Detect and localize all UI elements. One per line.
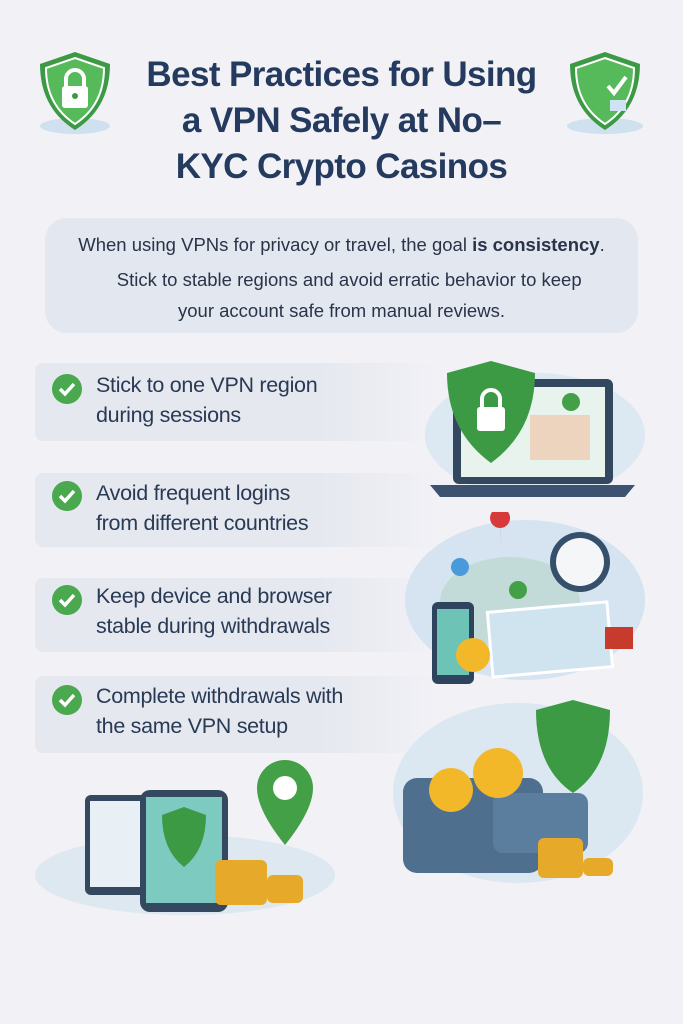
illustration: wallet with coins and shield xyxy=(393,700,643,883)
illustration: map with pins and clock xyxy=(405,512,645,684)
item 1: Stick to one VPN region xyxy=(96,373,317,397)
title: a VPN Safely at No– xyxy=(182,101,501,140)
icon: left shield xyxy=(40,52,110,134)
item 3: Keep device and browser xyxy=(96,584,332,608)
illustration: devices with pin and coins xyxy=(35,760,335,915)
title: KYC Crypto Casinos xyxy=(176,147,507,186)
item 2: from different countries xyxy=(96,511,308,535)
item 1: during sessions xyxy=(96,403,241,427)
item 1 xyxy=(35,363,435,441)
item 4 xyxy=(35,676,435,753)
item 3: stable during withdrawals xyxy=(96,614,330,638)
title xyxy=(146,55,537,186)
title: Best Practices for Using xyxy=(146,55,537,94)
intro panel: When using VPNs for privacy or travel, the goal is consistency. xyxy=(78,234,605,255)
intro panel: Stick to stable regions and avoid erratic behavior to keep xyxy=(117,269,582,290)
item 2: Avoid frequent logins xyxy=(96,481,290,505)
icon: right shield xyxy=(567,52,643,134)
intro panel: your account safe from manual reviews. xyxy=(178,300,505,321)
illustration: laptop with shield xyxy=(425,361,645,497)
item 4: Complete withdrawals with xyxy=(96,684,343,708)
intro panel xyxy=(45,218,638,333)
item 3 xyxy=(35,578,435,652)
item 2 xyxy=(35,473,435,547)
item 4: the same VPN setup xyxy=(96,714,288,738)
